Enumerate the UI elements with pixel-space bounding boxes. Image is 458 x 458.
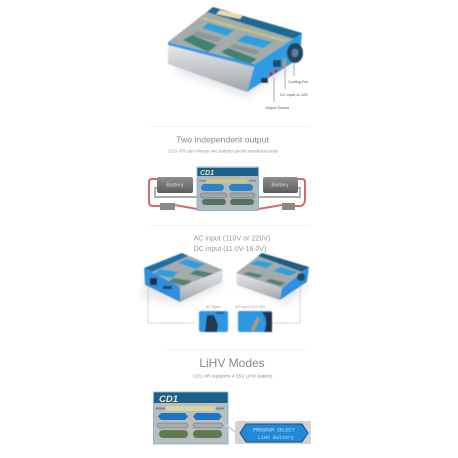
LCD text: PROGRAM SELECT bbox=[253, 428, 295, 434]
divider bbox=[150, 126, 310, 127]
callout connector bbox=[220, 420, 235, 432]
top face bbox=[168, 7, 302, 64]
divider bbox=[165, 349, 305, 350]
callout labels: DC Input 11-18V bbox=[280, 93, 308, 97]
yellow title line bbox=[201, 17, 286, 42]
LCD callout bbox=[235, 421, 311, 444]
right gray controls bbox=[229, 44, 260, 55]
buttons bbox=[202, 199, 226, 205]
left battery bbox=[157, 177, 193, 193]
LCD bbox=[240, 424, 308, 442]
AC close-up bbox=[199, 311, 228, 332]
yellow title bbox=[207, 179, 247, 183]
displays bbox=[158, 413, 188, 420]
heading: two independent output: Two independent output bbox=[176, 134, 269, 144]
logo: CD1 bbox=[159, 394, 178, 405]
LiHV charger panel bbox=[154, 392, 228, 444]
left connector bbox=[160, 203, 175, 210]
AC label: AC Input bbox=[206, 305, 221, 309]
right charger bbox=[236, 253, 309, 305]
button clusters bbox=[159, 430, 188, 438]
logo: CD1 bbox=[200, 170, 214, 177]
wiring diagram: Battery bbox=[271, 182, 289, 188]
side blue bbox=[247, 33, 302, 92]
white charger panel bbox=[197, 167, 258, 210]
caption: two outputs: CD1-XR can charge two battery packs simultaneously bbox=[168, 148, 279, 154]
heading: LiHV Modes: LiHV Modes bbox=[199, 356, 265, 370]
left buttons bbox=[183, 35, 217, 52]
heading: AC input: AC input (110V or 220V) bbox=[194, 234, 270, 242]
right battery bbox=[263, 177, 298, 193]
right buttons bbox=[221, 48, 257, 65]
fan bbox=[287, 43, 303, 63]
front face bbox=[168, 44, 255, 92]
heading: DC input: DC input (11.0V-18.0V) bbox=[194, 245, 266, 253]
callout lines bbox=[274, 63, 294, 102]
red cables bbox=[149, 179, 305, 209]
DC close-up bbox=[238, 311, 272, 332]
callout labels bbox=[265, 80, 308, 110]
sockets bbox=[273, 60, 281, 67]
left charger bbox=[140, 253, 225, 305]
wiring diagram bbox=[149, 167, 305, 210]
left gray controls bbox=[192, 31, 222, 42]
pills bbox=[200, 193, 227, 198]
right connector bbox=[282, 203, 295, 210]
pills bbox=[157, 423, 188, 428]
divider bbox=[150, 225, 310, 226]
logo bbox=[216, 10, 243, 19]
header bbox=[154, 392, 228, 403]
LCD callout: LiHV Battery bbox=[258, 435, 294, 441]
wiring diagram: Battery bbox=[166, 182, 184, 188]
caption: LiHV: CD1-XR supports 4.35V LiHV battery. bbox=[193, 374, 273, 380]
DC label: DC Input 11V-18V bbox=[235, 305, 266, 309]
title bar bbox=[166, 406, 215, 411]
black cables bbox=[155, 188, 300, 197]
right display bbox=[237, 35, 273, 48]
dashed connector lines bbox=[148, 285, 300, 323]
panel header bbox=[198, 168, 258, 176]
brand strip bbox=[207, 7, 302, 39]
charger photo: top bbox=[168, 7, 303, 98]
displays bbox=[201, 184, 224, 191]
callout labels: Output Socket bbox=[265, 106, 290, 110]
left display bbox=[202, 23, 234, 36]
callout labels: Cooling Fan bbox=[288, 80, 308, 84]
